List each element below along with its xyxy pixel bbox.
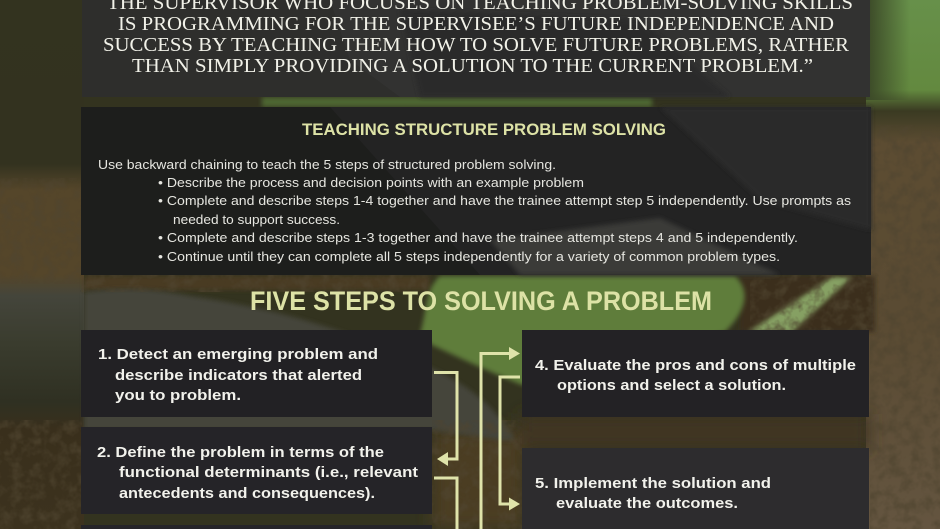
instructions text: • Complete and describe steps 1-3 together and have the trainee attempt steps 4 and 5 independently. bbox=[158, 231, 798, 245]
instructions text: Use backward chaining to teach the 5 steps of structured problem solving. bbox=[98, 158, 556, 172]
left edge of photo bbox=[0, 170, 84, 529]
instructions text: needed to support success. bbox=[173, 213, 340, 227]
quote text bbox=[103, 0, 853, 77]
instructions text: • Describe the process and decision points with an example problem bbox=[158, 176, 584, 190]
step 3 box (cropped) bbox=[81, 525, 432, 529]
step 1 box: you to problem. bbox=[115, 387, 241, 404]
instructions text: • Complete and describe steps 1-4 together and have the trainee attempt step 5 independently. Use prompts as bbox=[158, 194, 851, 208]
section heading: five steps: FIVE STEPS TO SOLVING A PROBLEM bbox=[250, 286, 712, 316]
quote text: SUCCESS BY TEACHING THEM HOW TO SOLVE FUTURE PROBLEMS, RATHER bbox=[103, 34, 849, 56]
step 5 box: 5. Implement the solution and bbox=[535, 475, 771, 492]
green seedling leaf bbox=[420, 276, 745, 385]
step 4 box bbox=[522, 330, 869, 417]
arrow: step 3 to step 4 bbox=[481, 347, 520, 529]
step 1 box: 1. Detect an emerging problem and bbox=[98, 346, 378, 363]
step 4 box: 4. Evaluate the pros and cons of multiple bbox=[535, 357, 856, 374]
step 2 box: antecedents and consequences). bbox=[119, 485, 375, 502]
instructions text bbox=[98, 158, 851, 264]
step 5 box bbox=[522, 448, 869, 529]
right edge of photo bbox=[866, 0, 940, 529]
gray hand bbox=[84, 289, 515, 440]
step 2 box: functional determinants (i.e., relevant bbox=[119, 464, 418, 481]
panel: quote bbox=[82, 0, 870, 97]
step 1 box: describe indicators that alerted bbox=[115, 367, 362, 384]
arrow: step 2 onward to step 3 bbox=[434, 478, 457, 529]
soil band behind section heading bbox=[84, 276, 875, 332]
quote text: IS PROGRAMMING FOR THE SUPERVISEE’S FUTURE INDEPENDENCE AND bbox=[118, 13, 834, 35]
step 4 box: options and select a solution. bbox=[557, 377, 786, 394]
panel heading: TEACHING STRUCTURE PROBLEM SOLVING bbox=[302, 121, 666, 139]
step 5 box: evaluate the outcomes. bbox=[556, 495, 738, 512]
arrow: step 4 to step 5 bbox=[500, 377, 520, 510]
step 2 box: 2. Define the problem in terms of the bbox=[97, 444, 384, 461]
instructions text: • Continue until they can complete all 5 steps independently for a variety of common problem types. bbox=[158, 250, 780, 264]
arrow: step 1 to step 2 bbox=[434, 372, 457, 466]
step 2 box bbox=[81, 427, 432, 514]
panel: teaching structure problem solving bbox=[81, 107, 871, 275]
step 1 box bbox=[81, 330, 432, 417]
quote text: THAN SIMPLY PROVIDING A SOLUTION TO THE CURRENT PROBLEM.” bbox=[132, 55, 813, 77]
